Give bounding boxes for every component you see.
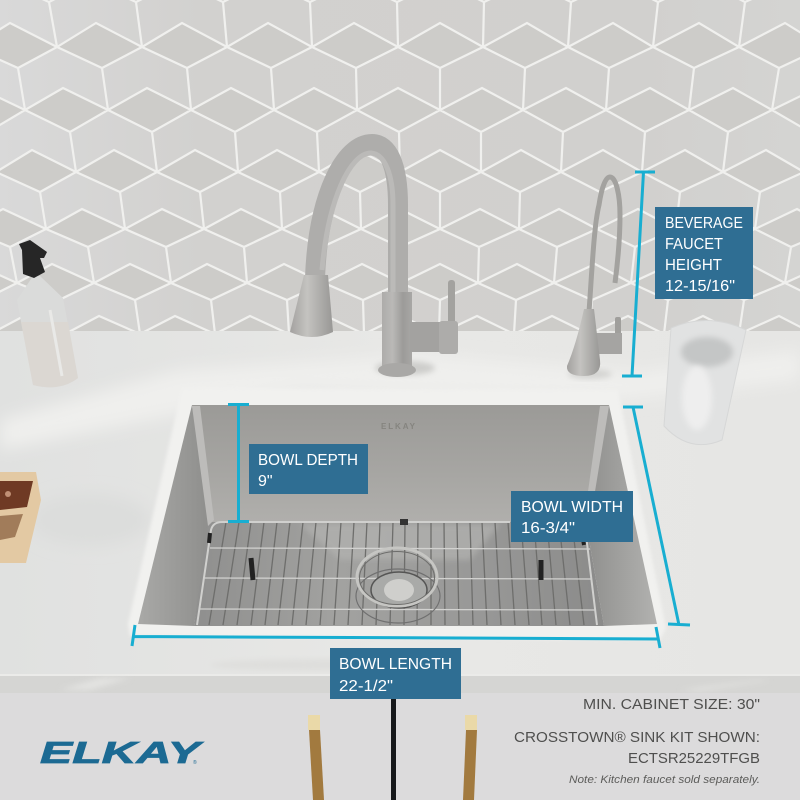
beverage base <box>567 309 600 376</box>
rack side bumpers <box>209 533 584 545</box>
label: bowl width: 16-3/4" <box>521 520 575 537</box>
pump <box>19 240 47 278</box>
sink rim <box>128 388 666 640</box>
faucet handle <box>410 322 440 352</box>
cabinet doors <box>0 693 800 800</box>
beverage lever <box>615 317 621 337</box>
label: beverage faucet height <box>655 207 753 299</box>
cabinet handle left <box>308 715 324 800</box>
faucet shadow <box>375 361 435 375</box>
label: bowl length: 22-1/2" <box>339 678 393 695</box>
Elkay logo <box>40 735 205 770</box>
cabinet handle right <box>463 715 477 800</box>
label: beverage faucet height: BEVERAGE <box>665 215 743 232</box>
sink back wall <box>192 405 609 522</box>
rack back tab <box>400 519 408 525</box>
dimension line: bowl depth <box>228 404 249 522</box>
label: beverage faucet height: 12-15/16" <box>665 278 735 295</box>
marble countertop <box>0 331 800 675</box>
dimension line: bowl width <box>623 407 690 625</box>
bottle highlight <box>50 310 62 376</box>
sink bowl <box>138 405 657 626</box>
wire rack <box>197 519 597 625</box>
sink kit model: ECTSR25229TFGB <box>628 750 760 767</box>
label: bowl depth: 9" <box>258 473 273 490</box>
sink kit model <box>514 729 760 767</box>
sink floor <box>194 522 604 626</box>
tiled backsplash <box>0 0 800 340</box>
label: beverage faucet height: HEIGHT <box>665 257 722 274</box>
rack clip right <box>538 560 544 580</box>
gooseneck spout <box>315 144 398 296</box>
label: bowl width: BOWL WIDTH <box>521 499 623 516</box>
sink right wall <box>586 405 657 626</box>
rack clip left <box>251 558 253 580</box>
kitchen faucet <box>290 144 458 377</box>
beverage spout <box>589 177 620 312</box>
floor reflection <box>300 524 500 560</box>
sink corner highlights <box>192 406 609 526</box>
minimum cabinet size: MIN. CABINET SIZE: 30" <box>583 696 760 713</box>
beverage faucet <box>567 177 622 379</box>
cabinet door gap <box>391 695 396 800</box>
label: bowl length: BOWL LENGTH <box>339 656 452 673</box>
faucet note: Note: Kitchen faucet sold separately. <box>569 774 760 786</box>
Elkay logo: ELKAY <box>40 735 205 770</box>
water glass <box>664 320 746 445</box>
counter front edge <box>0 674 800 693</box>
label: bowl depth: BOWL DEPTH <box>258 452 358 469</box>
label: bowl length <box>330 648 461 699</box>
dimension line: bowl length <box>132 625 660 648</box>
sink left wall <box>138 405 210 626</box>
faucet base <box>378 363 416 377</box>
stamped logo: ELKAY <box>381 422 416 431</box>
label: bowl depth <box>249 444 368 494</box>
faucet lever <box>448 280 455 326</box>
beverage handle <box>595 333 622 354</box>
soap liquid <box>21 322 78 387</box>
bottle body <box>17 276 78 387</box>
spray head <box>290 275 333 337</box>
Elkay logo: ® <box>193 759 197 766</box>
faucet body <box>382 292 412 367</box>
label: bowl width <box>511 491 633 542</box>
drain strainer <box>356 548 440 623</box>
dimension line: beverage faucet height <box>622 172 655 376</box>
sink kit model: CROSSTOWN® SINK KIT SHOWN: <box>514 729 760 746</box>
soap bottle <box>17 240 78 387</box>
label: beverage faucet height: FAUCET <box>665 236 723 253</box>
beverage faucet shadow <box>568 369 612 379</box>
wooden tray <box>0 472 41 563</box>
